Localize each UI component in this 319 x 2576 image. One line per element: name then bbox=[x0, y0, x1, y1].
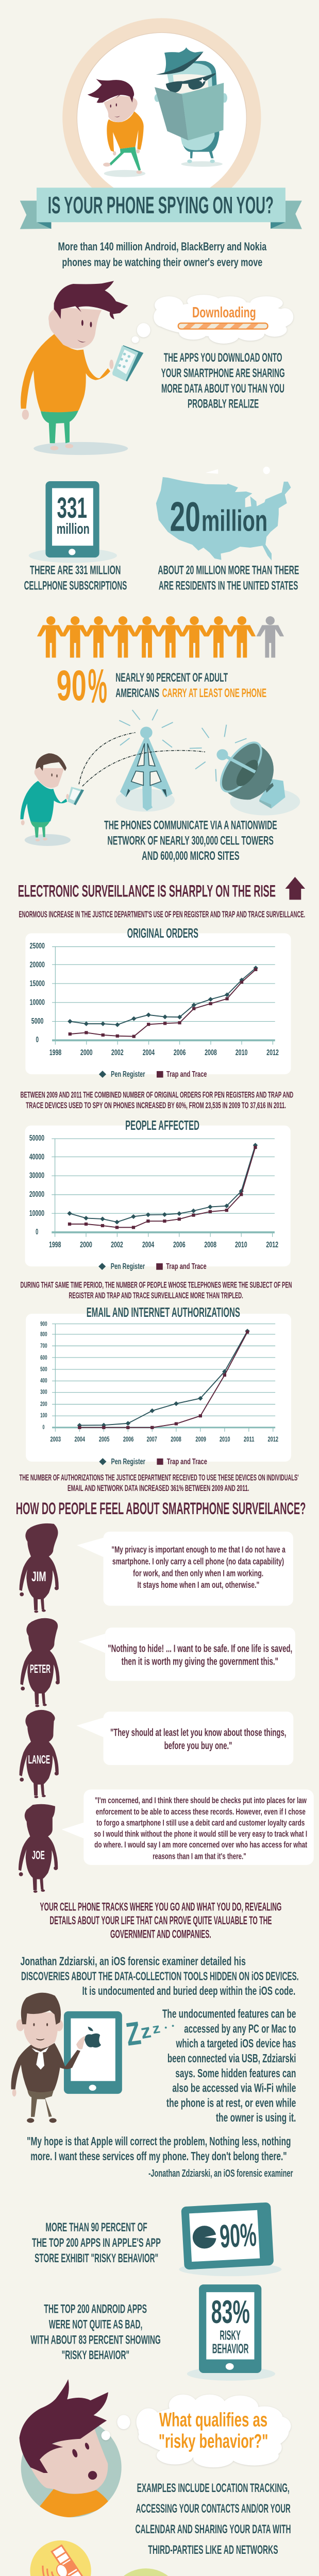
caption: combined original orders bbox=[20, 1090, 293, 1110]
text: adult americans carry a phone: AMERICANS bbox=[115, 686, 159, 700]
icon: cell tower bbox=[116, 709, 175, 811]
icon: tablet with sleeping apple bbox=[64, 2011, 122, 2094]
chart: email and internet authorizations: 400 bbox=[40, 1377, 47, 1384]
silhouette: Peter bbox=[20, 1618, 60, 1707]
silhouette: Peter: PETER bbox=[30, 1662, 51, 1675]
quote bubble: Jim: It stays home when I am out, otherwise." bbox=[137, 1580, 259, 1590]
chart: people affected: 0 bbox=[36, 1227, 38, 1236]
line: trap and trace bbox=[70, 1147, 255, 1227]
subtitle bbox=[58, 240, 266, 268]
chart: original orders: 2000 bbox=[80, 1048, 93, 1057]
chart: email and internet authorizations: 800 bbox=[40, 1331, 47, 1338]
chart: original orders: 2006 bbox=[174, 1048, 186, 1057]
chart: people affected: PEOPLE AFFECTED bbox=[125, 1117, 199, 1133]
text: phone tracks where you go: GOVERNMENT AND COMPANIES. bbox=[110, 1928, 211, 1940]
legend: Pen Register bbox=[111, 1262, 145, 1271]
caption: authorizations increased 361% bbox=[20, 1473, 299, 1493]
text: 90 percent of apple apps bbox=[32, 2221, 161, 2265]
text: examples of risky behavior bbox=[136, 2481, 291, 2557]
quote bubble: Peter bbox=[78, 1628, 295, 1681]
chart: people affected: 2012 bbox=[266, 1240, 278, 1249]
text: 83 percent of android apps: WERE NOT QUITE AS BAD, bbox=[49, 2318, 142, 2331]
chart: original orders: 2002 bbox=[111, 1048, 124, 1057]
chart: original orders: 2010 bbox=[236, 1048, 247, 1057]
chart: people affected: 1998 bbox=[49, 1240, 61, 1249]
chart: email and internet authorizations: 200 bbox=[40, 1400, 47, 1408]
chart: original orders: 2004 bbox=[143, 1048, 155, 1057]
chart: email and internet authorizations: 2009 bbox=[195, 1435, 206, 1443]
chart: original orders: ORIGINAL ORDERS bbox=[127, 925, 198, 941]
icon: contacts and wifi bbox=[109, 2568, 182, 2576]
zzz sleep marks bbox=[124, 2014, 174, 2053]
hero circle bbox=[62, 18, 261, 216]
text: 83 percent of android apps: WITH ABOUT 83 PERCENT SHOWING bbox=[30, 2333, 161, 2347]
illustration: worried boy bbox=[20, 2379, 122, 2517]
illustration: spy phone with newspaper bbox=[155, 47, 227, 167]
text: apps sharing data bbox=[161, 351, 285, 411]
caption: 331 million subscriptions: THERE ARE 331 MILLION bbox=[30, 564, 121, 578]
chart: original orders: 5000 bbox=[31, 1016, 43, 1026]
silhouette: Lance: LANCE bbox=[28, 1753, 50, 1766]
chart: email and internet authorizations: 0 bbox=[43, 1423, 44, 1431]
icon: tilted tablet 90 percent bbox=[179, 2202, 281, 2276]
legend: Pen Register bbox=[111, 1457, 145, 1466]
stat: 90 percent: 90 bbox=[57, 661, 87, 709]
line: trap and trace bbox=[79, 1332, 247, 1428]
chart: people affected bbox=[25, 1117, 291, 1271]
chart: email and internet authorizations: 600 bbox=[40, 1354, 47, 1361]
illustration: boy looking at phone bbox=[21, 281, 143, 455]
chart: email and internet authorizations: 2011 bbox=[244, 1435, 255, 1443]
chart: original orders: 10000 bbox=[30, 998, 45, 1007]
chart: original orders: 2008 bbox=[205, 1048, 217, 1057]
legend: Pen Register bbox=[111, 1070, 145, 1079]
icon: tablet 83 percent: RISKY bbox=[220, 2328, 241, 2343]
chart: original orders: 20000 bbox=[30, 960, 45, 970]
icon: tablet 83 percent: 83% bbox=[211, 2294, 250, 2330]
thought cloud: downloading bbox=[131, 295, 293, 344]
zzz sleep marks: z bbox=[151, 2020, 161, 2037]
legend bbox=[99, 1070, 207, 1079]
chart: people affected: 40000 bbox=[29, 1153, 44, 1161]
caption: 331 million subscriptions: CELLPHONE SUBSCRIPTIONS bbox=[24, 579, 127, 592]
illustration: walking boy bbox=[88, 79, 145, 177]
chart: email and internet authorizations: 2006 bbox=[123, 1435, 134, 1443]
icon: tablet 331 million bbox=[29, 481, 117, 563]
text: adult americans carry a phone bbox=[115, 671, 266, 700]
legend bbox=[98, 1262, 207, 1271]
text: nationwide network bbox=[104, 818, 277, 863]
legend: Trap and Trace bbox=[166, 1070, 207, 1079]
title banner bbox=[20, 188, 302, 229]
progress bar bbox=[178, 323, 268, 329]
text: 83 percent of android apps bbox=[30, 2302, 161, 2362]
silhouette: Jim bbox=[20, 1523, 59, 1613]
illustration: person with phone bbox=[20, 753, 84, 846]
thought cloud: risky behavior bbox=[102, 2395, 291, 2467]
text: 90 percent of apple apps: MORE THAN 90 PERCENT OF bbox=[45, 2221, 147, 2234]
icon: tablet 331 million: 331 bbox=[57, 492, 87, 524]
chart: email and internet authorizations: 700 bbox=[40, 1342, 47, 1349]
chart: original orders: 15000 bbox=[30, 979, 45, 988]
chart: email and internet authorizations: 2004 bbox=[74, 1435, 85, 1443]
chart: people affected: 20000 bbox=[29, 1190, 44, 1199]
chart: email and internet authorizations: 300 bbox=[40, 1388, 47, 1396]
chart: email and internet authorizations: 2005 bbox=[99, 1435, 110, 1443]
chart: original orders bbox=[25, 925, 291, 1079]
quote bubble: Lance: before you buy one." bbox=[164, 1740, 232, 1752]
icon: satellite dish bbox=[190, 725, 300, 816]
text: 83 percent of android apps: THE TOP 200 ANDROID APPS bbox=[44, 2302, 147, 2316]
icon: up arrow bbox=[285, 877, 305, 900]
caption: 331 million subscriptions bbox=[24, 564, 127, 592]
zzz sleep marks: z bbox=[139, 2020, 153, 2043]
icon: tablet 83 percent: BEHAVIOR bbox=[212, 2341, 248, 2356]
silhouette: Joe: JOE bbox=[32, 1849, 45, 1861]
quote bubble: Joe bbox=[62, 1789, 314, 1865]
chart: original orders: 25000 bbox=[30, 941, 45, 951]
chart: email and internet authorizations: 900 bbox=[40, 1320, 47, 1327]
downloading label: Downloading bbox=[192, 304, 256, 321]
line: pen register bbox=[70, 1145, 255, 1222]
text: 83 percent of android apps: "RISKY BEHAVIOR" bbox=[62, 2349, 129, 2362]
line: trap and trace bbox=[70, 970, 256, 1037]
icon: tablet 331 million: million bbox=[57, 521, 90, 537]
icon row: ten people, nine highlighted bbox=[37, 616, 284, 658]
silhouette: Jim: JIM bbox=[31, 1568, 46, 1584]
text: 90 percent of apple apps: THE TOP 200 APPS IN APPLE'S APP bbox=[32, 2236, 161, 2250]
icon: tilted tablet 90 percent: 90% bbox=[219, 2216, 257, 2255]
chart: original orders: 2012 bbox=[266, 1048, 279, 1057]
icon: satellite location tracking bbox=[30, 2540, 91, 2576]
signal arcs bbox=[79, 733, 205, 786]
chart: email and internet authorizations bbox=[26, 1304, 291, 1466]
legend: Trap and Trace bbox=[167, 1457, 207, 1466]
legend bbox=[99, 1457, 207, 1466]
chart: email and internet authorizations: 2012 bbox=[268, 1435, 278, 1443]
chart: people affected: 2006 bbox=[173, 1240, 186, 1249]
chart: people affected: 30000 bbox=[29, 1171, 44, 1180]
chart: email and internet authorizations: 2010 bbox=[220, 1435, 230, 1443]
chart: people affected: 2004 bbox=[142, 1240, 154, 1249]
chart: email and internet authorizations: 2008 bbox=[171, 1435, 181, 1443]
chart: email and internet authorizations: 2007 bbox=[147, 1435, 157, 1443]
chart: email and internet authorizations: 100 bbox=[40, 1412, 47, 1419]
chart: people affected: 2002 bbox=[111, 1240, 123, 1249]
line: pen register bbox=[70, 968, 256, 1025]
chart: original orders: 0 bbox=[36, 1035, 39, 1044]
chart: people affected: 50000 bbox=[29, 1133, 44, 1143]
text: 90 percent of apple apps: STORE EXHIBIT "RISKY BEHAVIOR" bbox=[35, 2251, 158, 2265]
line: pen register bbox=[79, 1331, 247, 1426]
caption: 20 million more than residents bbox=[158, 564, 299, 592]
silhouette: Joe bbox=[19, 1804, 58, 1893]
chart: original orders: 1998 bbox=[49, 1048, 61, 1057]
chart: people affected: 2010 bbox=[235, 1240, 247, 1249]
text: phone tracks where you go bbox=[40, 1901, 281, 1940]
quote bubble: Joe: reasons than I am that it's there." bbox=[153, 1852, 246, 1861]
icon: tablet 83 percent bbox=[187, 2284, 275, 2381]
text: Jonathan Zdziarski discoveries bbox=[20, 1955, 299, 1997]
silhouette: Lance bbox=[20, 1710, 59, 1798]
quote: Zdziarski bbox=[27, 2134, 291, 2163]
map: united states 20 million: million bbox=[202, 504, 267, 537]
caption: people more than tripled bbox=[20, 1280, 292, 1300]
zzz sleep marks: Z bbox=[124, 2014, 143, 2053]
legend: Trap and Trace bbox=[166, 1262, 207, 1271]
chart: people affected: 2000 bbox=[80, 1240, 92, 1249]
text: nationwide network: AND 600,000 MICRO SITES bbox=[142, 849, 240, 863]
chart: email and internet authorizations: 500 bbox=[40, 1366, 47, 1372]
quote bubble: Jim bbox=[77, 1532, 293, 1606]
map: united states 20 million: 20 bbox=[170, 494, 200, 540]
chart: email and internet authorizations: 2003 bbox=[51, 1435, 61, 1443]
quote bubble: Lance bbox=[76, 1711, 293, 1765]
text: undocumented features bbox=[162, 2007, 296, 2124]
illustration: man pointing at tablet bbox=[11, 1993, 86, 2123]
text: apps sharing data: PROBABLY REALIZE bbox=[188, 397, 259, 411]
chart: people affected: 10000 bbox=[29, 1209, 44, 1218]
chart: people affected: 2008 bbox=[204, 1240, 216, 1249]
map: united states 20 million bbox=[156, 467, 291, 561]
text: % bbox=[88, 659, 107, 713]
text: adult americans carry a phone: NEARLY 90 PERCENT OF ADULT bbox=[115, 671, 228, 685]
